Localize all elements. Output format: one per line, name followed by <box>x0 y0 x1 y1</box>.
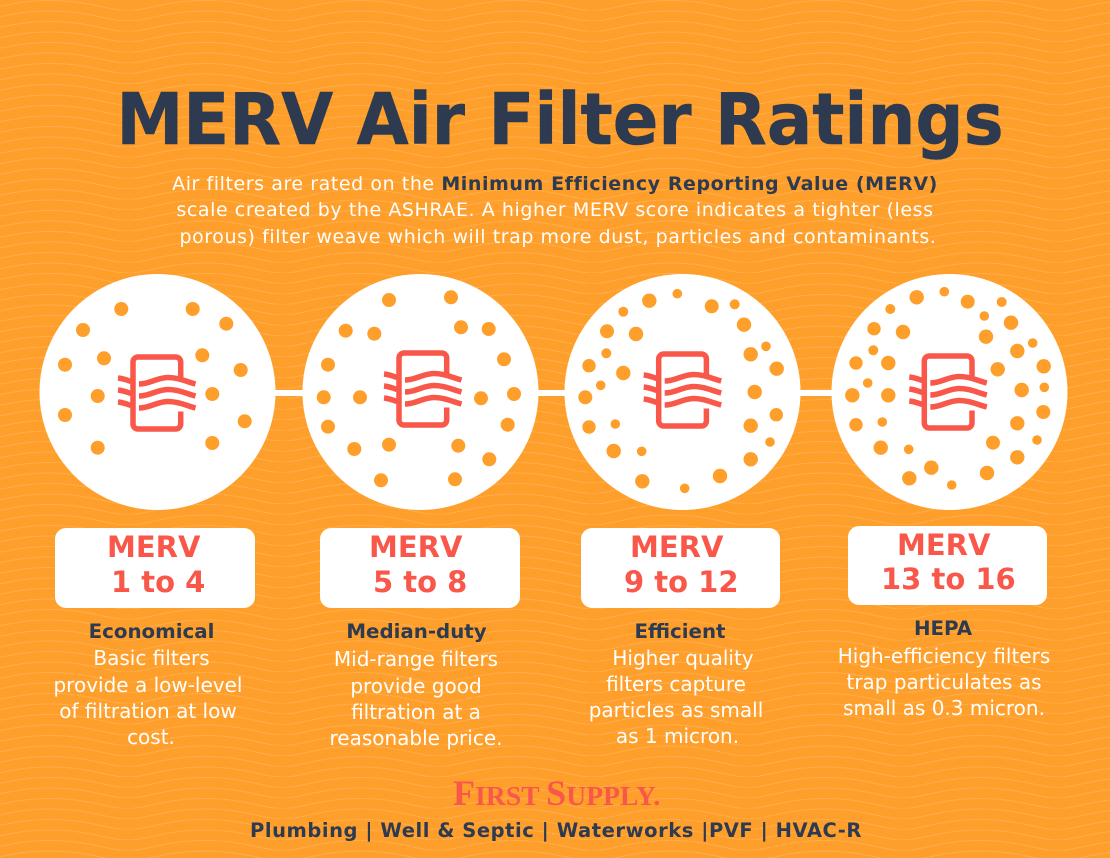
circle 4: MERV 13 to 16 <box>832 274 1068 510</box>
description: Median-duty: Median-duty <box>346 620 487 643</box>
rating box: MERV 1 to 4: 1 to 4 <box>111 565 205 599</box>
connector bars <box>270 390 837 396</box>
circle 2: MERV 5 to 8 <box>302 274 538 510</box>
description: HEPA: HEPA <box>914 617 972 640</box>
rating box: MERV 9 to 12 <box>581 528 780 608</box>
description: HEPA <box>838 617 1050 720</box>
description: Economical: of filtration at low <box>59 699 237 723</box>
rating box: MERV 13 to 16: 13 to 16 <box>881 562 1016 596</box>
description: Efficient: particles as small <box>589 698 763 722</box>
description: Efficient: Efficient <box>634 620 726 643</box>
rating box: MERV 5 to 8: 5 to 8 <box>373 565 467 599</box>
icon: air filter <box>644 354 721 426</box>
description: Median-duty: Mid-range filters <box>334 647 498 671</box>
intro text: porous) filter weave which will trap more dust, particles and contaminants. <box>179 226 936 248</box>
description: HEPA: High-efficiency filters <box>838 644 1050 668</box>
rating box: MERV 9 to 12: MERV <box>630 530 723 564</box>
description: Efficient: Higher quality <box>612 646 754 670</box>
description: Economical: provide a low-level <box>53 673 242 697</box>
description: Economical: Economical <box>89 620 214 643</box>
title: MERV Air Filter Ratings <box>116 78 1003 160</box>
description: Economical: Basic filters <box>93 646 210 670</box>
description: Median-duty <box>330 620 502 750</box>
icon: air filter <box>384 353 462 425</box>
description: Median-duty: reasonable price. <box>330 726 502 750</box>
intro text: Air filters are rated on the Minimum Efficiency Reporting Value (MERV) <box>172 173 938 195</box>
rating box: MERV 1 to 4 <box>55 528 255 608</box>
description: HEPA: small as 0.3 micron. <box>843 696 1045 720</box>
description: Economical: cost. <box>127 725 175 749</box>
footer services line: Plumbing | Well & Septic | Waterworks |PVF | HVAC-R <box>250 819 862 842</box>
circle 3: MERV 9 to 12 <box>564 274 800 510</box>
description: Median-duty: filtration at a <box>351 700 481 724</box>
description: Median-duty: provide good <box>350 674 482 698</box>
rating box: MERV 1 to 4: MERV <box>107 530 200 564</box>
description: Efficient <box>589 620 763 748</box>
description: Efficient: filters capture <box>606 672 746 696</box>
description: Efficient: as 1 micron. <box>616 724 739 748</box>
rating box: MERV 5 to 8: MERV <box>369 530 462 564</box>
icon: air filter <box>909 356 987 428</box>
rating box: MERV 5 to 8 <box>320 528 520 608</box>
intro text <box>172 173 938 248</box>
description: Economical <box>53 620 242 749</box>
logo: First Supply: FIRST SUPPLY. <box>453 773 660 813</box>
circle diagram row <box>40 274 1068 510</box>
circle 1: MERV 1 to 4 <box>40 274 276 510</box>
rating box: MERV 9 to 12: 9 to 12 <box>624 565 739 599</box>
rating box: MERV 13 to 16: MERV <box>897 528 990 562</box>
icon: air filter <box>118 357 196 429</box>
description: HEPA: trap particulates as <box>846 670 1042 694</box>
rating box: MERV 13 to 16 <box>848 526 1047 605</box>
intro text: scale created by the ASHRAE. A higher MERV score indicates a tighter (less <box>176 199 934 221</box>
